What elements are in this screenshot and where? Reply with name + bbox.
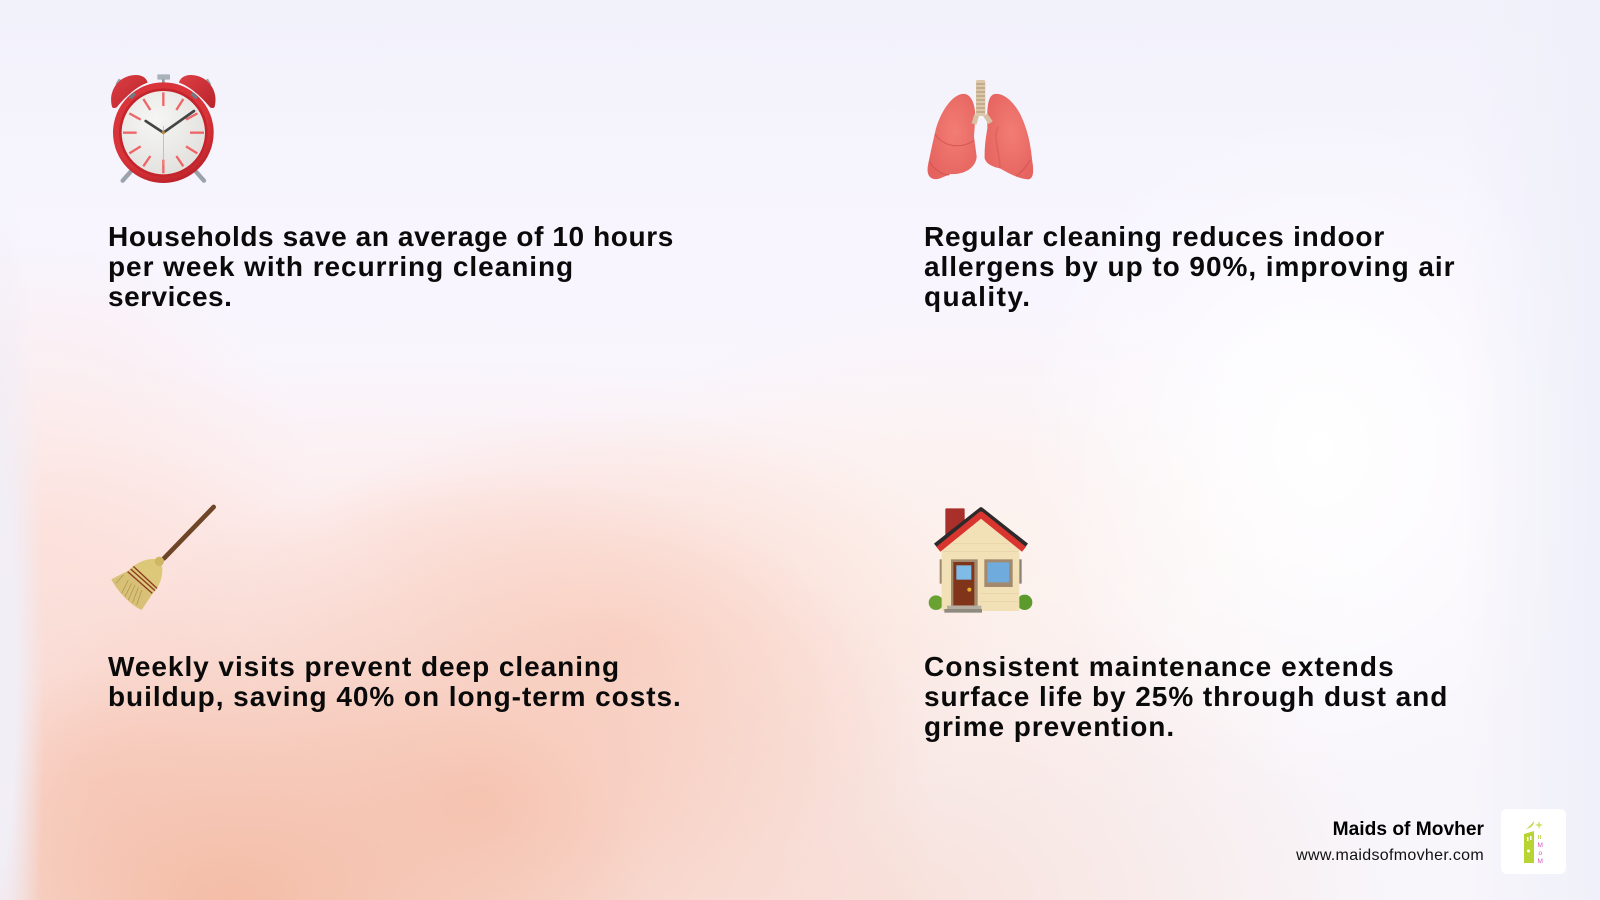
text: weekly visits: Weekly visits prevent deep cleaning: [108, 651, 620, 682]
text: allergens: Regular cleaning reduces indoor: [924, 221, 1385, 252]
text: weekly visits: buildup, saving 40% on long-term costs.: [108, 681, 682, 712]
text: surface life: Consistent maintenance extends: [924, 651, 1395, 682]
text: hours saved: services.: [108, 281, 232, 312]
text: hours saved: [108, 221, 674, 312]
text: hours saved: Households save an average of 10 hours: [108, 221, 674, 252]
brand: logo: o: [1538, 850, 1542, 857]
brand: logo: [1501, 809, 1566, 874]
text: allergens: quality.: [924, 281, 1032, 312]
text: surface life: surface life by 25% through dust and: [924, 681, 1448, 712]
icon: house: [928, 507, 1032, 613]
text: weekly visits: [108, 651, 682, 712]
icon: lungs: [928, 80, 1034, 180]
brand: website: www.maidsofmovher.com: [1296, 847, 1484, 864]
text: surface life: [924, 651, 1448, 742]
text: surface life: grime prevention.: [924, 711, 1175, 742]
text: allergens: [924, 221, 1456, 312]
brand: logo: M: [1538, 842, 1543, 849]
text: hours saved: per week with recurring cleaning: [108, 251, 574, 282]
text: allergens: allergens by up to 90%, improving air: [924, 251, 1456, 282]
brand: company name: Maids of Movher: [1333, 819, 1484, 840]
brand: logo: M: [1538, 858, 1543, 865]
icon: broom: [111, 504, 216, 610]
icon: alarm clock: [111, 74, 216, 183]
